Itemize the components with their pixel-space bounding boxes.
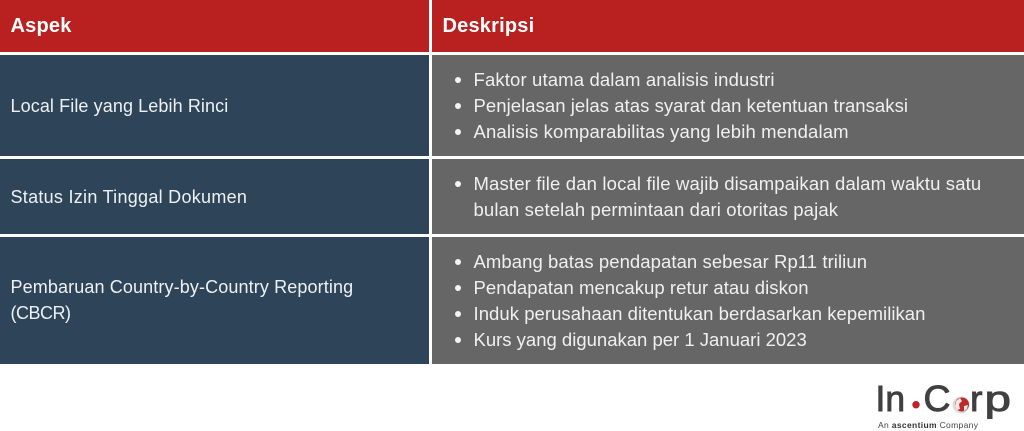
row 1 bullets: Faktor utama dalam analisis industri <box>474 69 775 90</box>
logo: InCorp <box>876 378 1011 430</box>
row 3 aspect: (CBCR) <box>10 303 70 323</box>
row 1 bullets: Penjelasan jelas atas syarat dan ketentuan transaksi <box>474 95 908 116</box>
row 3 aspect <box>0 237 429 364</box>
row 1 aspect: Local File yang Lebih Rinci <box>10 96 228 116</box>
row 2 bullet: bulan setelah permintaan dari otoritas pajak <box>474 199 838 220</box>
logo: InCorp: In <box>876 378 905 419</box>
row 2 description <box>432 159 1024 234</box>
logo: InCorp: C <box>924 378 950 419</box>
header cell: Aspek: Aspek <box>10 15 72 37</box>
row 3 aspect: Pembaruan Country-by-Country Reporting <box>10 277 353 297</box>
row 3 bullets <box>455 251 926 350</box>
row 2 bullet: Master file dan local file wajib disampaikan dalam waktu satu <box>474 173 981 194</box>
row 2 bullet <box>455 173 981 220</box>
header cell: Aspek <box>0 0 429 52</box>
row 1 description <box>432 55 1024 156</box>
row 3 bullets: Kurs yang digunakan per 1 Januari 2023 <box>474 329 807 350</box>
row 2 aspect: Status Izin Tinggal Dokumen <box>10 187 247 207</box>
logo: InCorp: r <box>970 378 982 419</box>
row 2 aspect <box>0 159 429 234</box>
row 1 bullets <box>455 69 908 142</box>
header cell: Deskripsi: Deskripsi <box>442 15 534 37</box>
row 3 bullets: Pendapatan mencakup retur atau diskon <box>474 277 809 298</box>
logo: InCorp: p <box>984 378 1011 419</box>
row 3 bullets: Induk perusahaan ditentukan berdasarkan kepemilikan <box>474 303 926 324</box>
header cell: Deskripsi <box>432 0 1024 52</box>
row 3 description <box>432 237 1024 364</box>
row 1 aspect <box>0 55 429 156</box>
row 3 bullets: Ambang batas pendapatan sebesar Rp11 triliun <box>474 251 867 272</box>
row 1 bullets: Analisis komparabilitas yang lebih mendalam <box>474 121 849 142</box>
logo: InCorp: An ascentium Company <box>878 420 979 430</box>
